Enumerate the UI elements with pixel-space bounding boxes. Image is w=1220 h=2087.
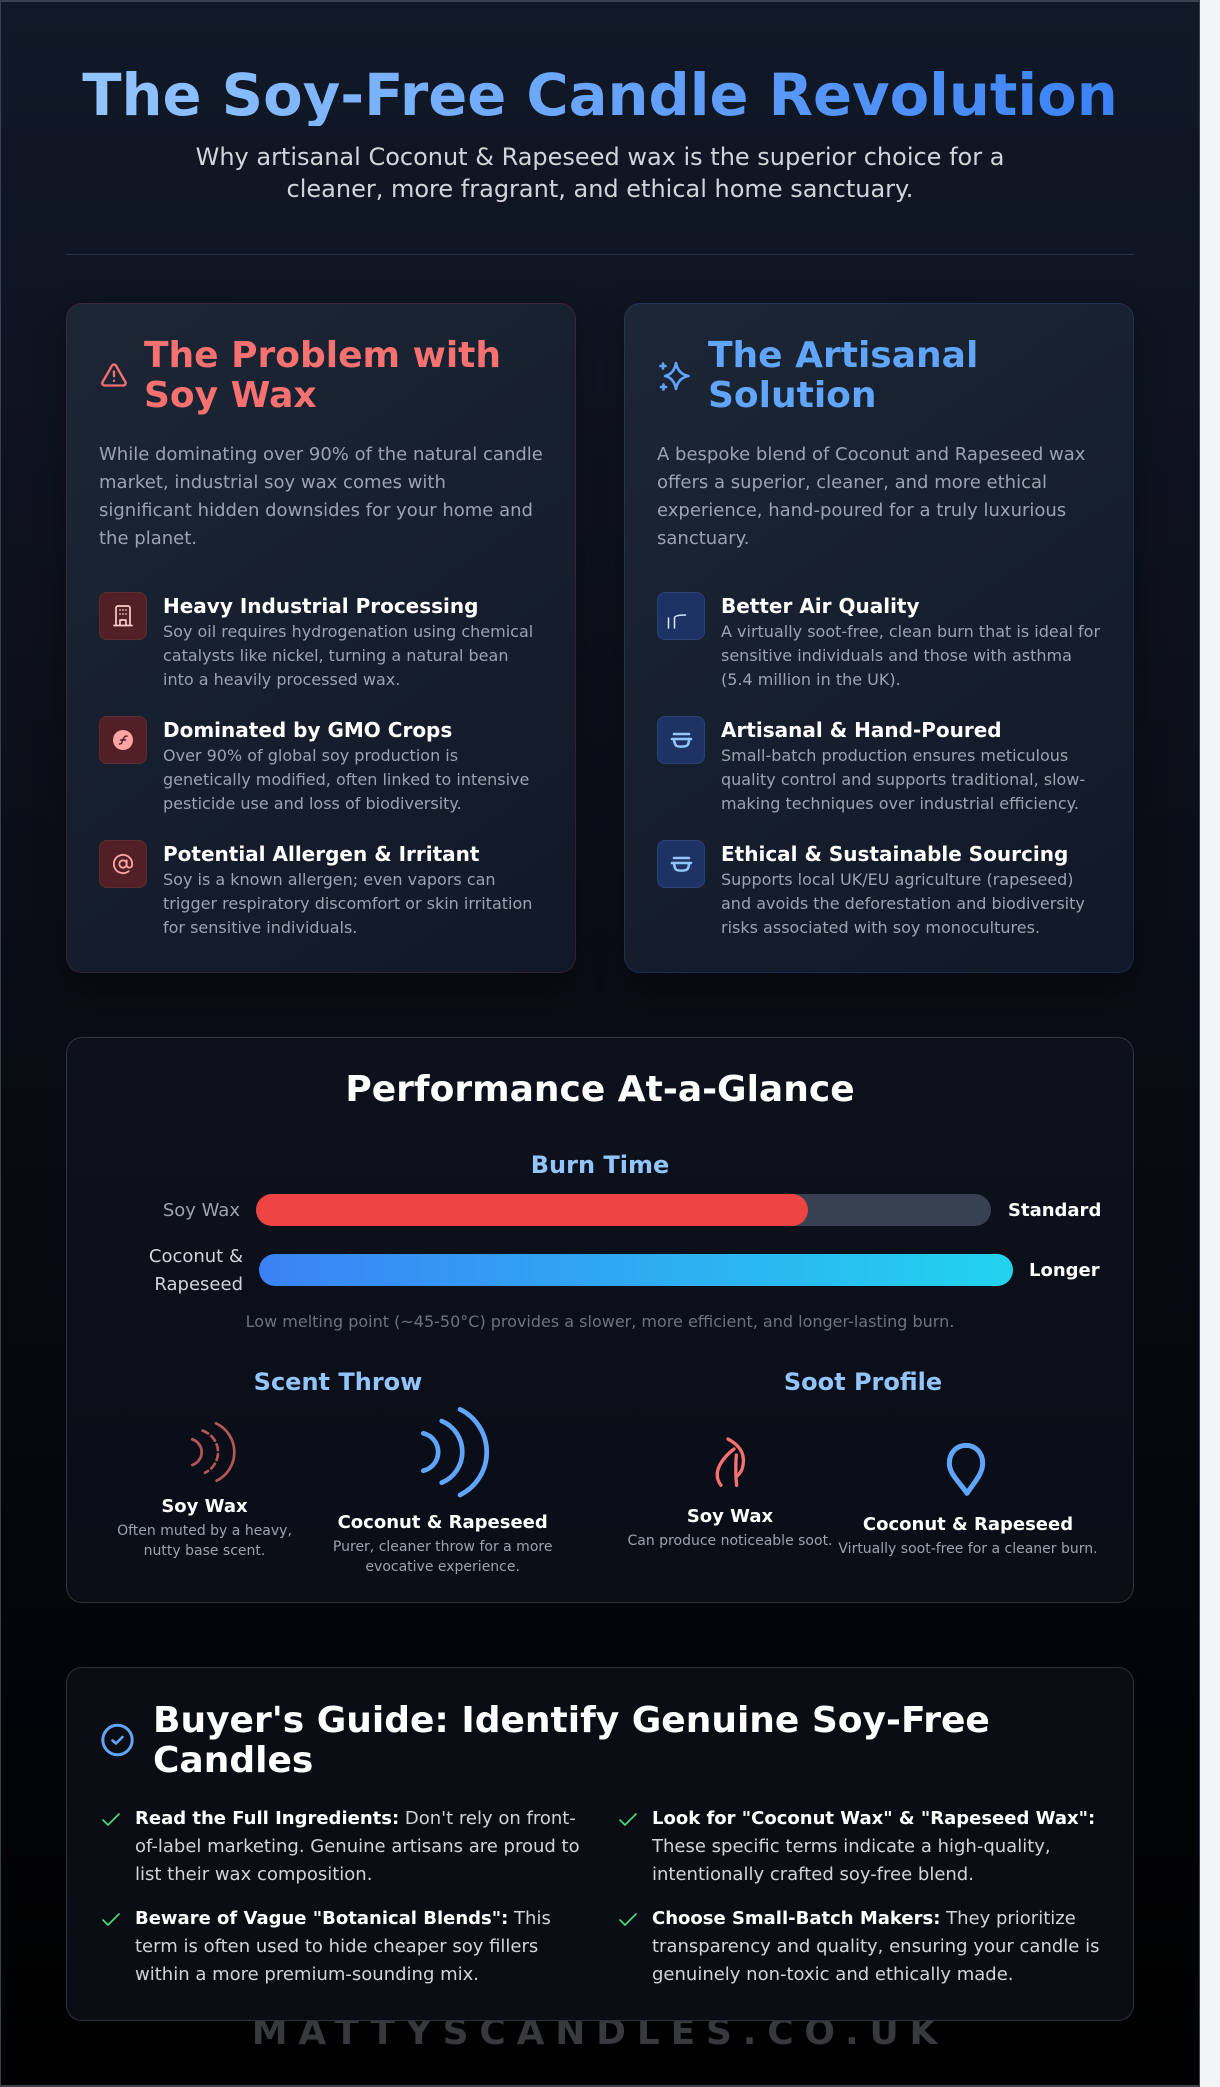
item title: Ethical & Sustainable Sourcing — [721, 842, 1068, 866]
icon: at sign — [99, 840, 147, 888]
item description: pesticide use and loss of biodiversity. — [163, 794, 462, 813]
item description: A virtually soot-free, clean burn that is ideal for — [721, 622, 1100, 641]
item description — [163, 622, 533, 689]
tip text: of-label marketing. Genuine artisans are proud to — [135, 1836, 580, 1857]
intro text: problem: While dominating over 90% of the natural candle — [99, 444, 543, 465]
value: standard: Standard — [1008, 1200, 1101, 1221]
icon: building — [99, 592, 147, 640]
item description — [721, 746, 1085, 813]
tip text: intentionally crafted soy-free blend. — [652, 1864, 974, 1885]
item: heavy industrial processing — [99, 592, 533, 689]
item title: Heavy Industrial Processing — [163, 594, 478, 618]
subtitle: cleaner, more fragrant, and ethical home sanctuary. — [287, 175, 913, 203]
footer watermark: MATTYSCANDLES.CO.UK — [252, 2012, 948, 2053]
heading: problem: Soy Wax — [144, 375, 317, 416]
heading: buyer's guide: Candles — [153, 1740, 313, 1781]
item description — [721, 622, 1100, 689]
item description: Soy oil requires hydrogenation using chemical — [163, 622, 533, 641]
intro text: solution: experience, hand-poured for a truly luxurious — [657, 500, 1066, 521]
text: scent coconut and rapeseed: Purer, cleaner throw for a more — [333, 1539, 552, 1555]
item description: sensitive individuals and those with asthma — [721, 646, 1072, 665]
intro text: solution — [657, 444, 1085, 549]
intro text: problem: significant hidden downsides for your home and — [99, 500, 533, 521]
intro text: problem — [99, 444, 543, 549]
icon: wind fragment — [657, 592, 705, 640]
icon: check — [102, 1913, 120, 1926]
tip text: Beware of Vague "Botanical Blends": This — [135, 1908, 551, 1929]
item: potential allergen — [99, 840, 532, 937]
tip text: list their wax composition. — [135, 1864, 372, 1885]
panel: performance at-a-glance — [66, 1037, 1134, 1603]
heading: scent throw: Scent Throw — [254, 1368, 422, 1396]
chart heading: burn time: Burn Time — [531, 1151, 669, 1179]
bar chart: burn time — [149, 1194, 1101, 1295]
item description: into a heavily processed wax. — [163, 670, 400, 689]
icon: clean droplet — [946, 1442, 986, 1496]
icon: GMO disc — [99, 716, 147, 764]
item: artisanal and hand-poured — [657, 716, 1085, 813]
tip text: genuinely non-toxic and ethically made. — [652, 1964, 1014, 1985]
text: scent coconut and rapeseed: evocative experience. — [365, 1559, 520, 1575]
heading: solution: Solution — [708, 375, 877, 416]
subtitle — [196, 143, 1004, 203]
tip text — [135, 1908, 551, 1985]
item description: quality control and supports traditional, slow- — [721, 770, 1085, 789]
item description: catalysts like nickel, turning a natural bean — [163, 646, 508, 665]
intro text: solution: sanctuary. — [657, 528, 749, 549]
tip text: term is often used to hide cheaper soy fillers — [135, 1936, 538, 1957]
heading: buyer's guide: Buyer's Guide: Identify Genuine Soy-Free — [153, 1700, 990, 1741]
tip text: Look for "Coconut Wax" & "Rapeseed Wax": — [652, 1808, 1095, 1829]
item description: Soy is a known allergen; even vapors can — [163, 870, 496, 889]
item: ethical and sustainable sourcing — [657, 840, 1085, 937]
item title: Potential Allergen & Irritant — [163, 842, 479, 866]
item title: Artisanal & Hand-Poured — [721, 718, 1002, 742]
heading: buyer's guide — [153, 1700, 990, 1781]
tip: look for coconut wax and rapeseed wax — [619, 1808, 1095, 1885]
text: scent soy wax — [117, 1496, 292, 1559]
tip: choose small-batch makers — [616, 1905, 1106, 1989]
text: soot soy wax: Can produce noticeable soot. — [627, 1533, 833, 1549]
text: scent coconut and rapeseed: Coconut & Rapeseed — [338, 1512, 548, 1533]
intro text: solution: A bespoke blend of Coconut and Rapeseed wax — [657, 444, 1085, 465]
heading: solution — [708, 335, 978, 416]
icon: check — [619, 1813, 637, 1826]
text: soot soy wax — [627, 1506, 833, 1549]
intro text: problem: market, industrial soy wax comes with — [99, 472, 446, 493]
label: soy wax: Soy Wax — [163, 1200, 240, 1221]
bar: coconut and rapeseed — [258, 1254, 1013, 1286]
icon: bowl — [657, 840, 705, 888]
label: coconut and rapeseed: Rapeseed — [154, 1274, 243, 1295]
item description: genetically modified, often linked to intensive — [163, 770, 529, 789]
tip text: These specific terms indicate a high-quality, — [652, 1836, 1051, 1857]
panel: buyer's guide — [66, 1667, 1134, 2021]
text: soot soy wax: Soy Wax — [687, 1506, 773, 1527]
tip text — [652, 1808, 1095, 1885]
item description — [721, 870, 1085, 937]
panel: the problem with soy wax — [66, 303, 576, 973]
intro text: solution: offers a superior, cleaner, and more ethical — [657, 472, 1047, 493]
intro text: problem: the planet. — [99, 528, 197, 549]
heading: performance: Performance At-a-Glance — [345, 1069, 855, 1110]
icon: weak scent waves — [190, 1422, 236, 1482]
tip text — [135, 1808, 580, 1885]
icon: sparkles — [659, 362, 690, 391]
subtitle: Why artisanal Coconut & Rapeseed wax is the superior choice for a — [196, 143, 1004, 171]
tip: read the full ingredients — [102, 1808, 580, 1885]
text: scent soy wax: nutty base scent. — [144, 1543, 265, 1559]
text: soot coconut and rapeseed — [838, 1514, 1098, 1557]
item description: Supports local UK/EU agriculture (rapeseed) — [721, 870, 1074, 889]
heading: soot profile: Soot Profile — [784, 1368, 942, 1396]
icon: sooty flame — [716, 1437, 746, 1487]
icon: circle check — [101, 1724, 134, 1756]
tip text: Choose Small-Batch Makers: They prioritize — [652, 1908, 1076, 1929]
panel: the artisanal solution — [624, 303, 1134, 973]
value: longer: Longer — [1029, 1260, 1100, 1281]
item description — [163, 870, 532, 937]
icon: bowl — [657, 716, 705, 764]
text: scent coconut and rapeseed — [333, 1512, 552, 1575]
item description: making techniques over industrial efficiency. — [721, 794, 1079, 813]
tip text: Read the Full Ingredients: Don't rely on front- — [135, 1808, 576, 1829]
text: soot coconut and rapeseed: Coconut & Rapeseed — [863, 1514, 1073, 1535]
label: coconut and rapeseed — [149, 1246, 243, 1295]
item description: Over 90% of global soy production is — [163, 746, 458, 765]
text: scent soy wax: Often muted by a heavy, — [117, 1523, 292, 1539]
item: dominated by GMO crops — [99, 716, 529, 813]
tip text: within a more premium-sounding mix. — [135, 1964, 479, 1985]
tip text — [652, 1905, 1099, 1989]
chart note: Low melting point (~45-50°C) provides a slower, more efficient, and longer-lasting burn. — [246, 1312, 954, 1331]
icon: check — [616, 1908, 640, 1932]
item description: and avoids the deforestation and biodiversity — [721, 894, 1085, 913]
item description — [163, 746, 529, 813]
heading: solution: The Artisanal — [708, 335, 978, 376]
item: better air quality — [657, 592, 1100, 689]
item description: (5.4 million in the UK). — [721, 670, 901, 689]
item description: trigger respiratory discomfort or skin irritation — [163, 894, 532, 913]
item title: Dominated by GMO Crops — [163, 718, 452, 742]
heading: problem — [144, 335, 501, 416]
item description: for sensitive individuals. — [163, 918, 357, 937]
heading: problem: The Problem with — [144, 335, 501, 376]
icon: strong scent waves — [421, 1407, 490, 1498]
item title: Better Air Quality — [721, 594, 920, 618]
icon: warning triangle — [101, 363, 127, 387]
text: soot coconut and rapeseed: Virtually soot-free for a cleaner burn. — [838, 1541, 1098, 1557]
tip: beware of vague botanical blends — [102, 1908, 551, 1985]
label: coconut and rapeseed: Coconut & — [149, 1246, 243, 1267]
text: scent soy wax: Soy Wax — [161, 1496, 248, 1517]
icon: check — [102, 1813, 120, 1826]
tip text: transparency and quality, ensuring your candle is — [652, 1936, 1099, 1957]
item description: Small-batch production ensures meticulous — [721, 746, 1068, 765]
title: The Soy-Free Candle Revolution — [82, 62, 1118, 129]
item description: risks associated with soy monocultures. — [721, 918, 1040, 937]
bar: soy wax — [256, 1194, 991, 1226]
